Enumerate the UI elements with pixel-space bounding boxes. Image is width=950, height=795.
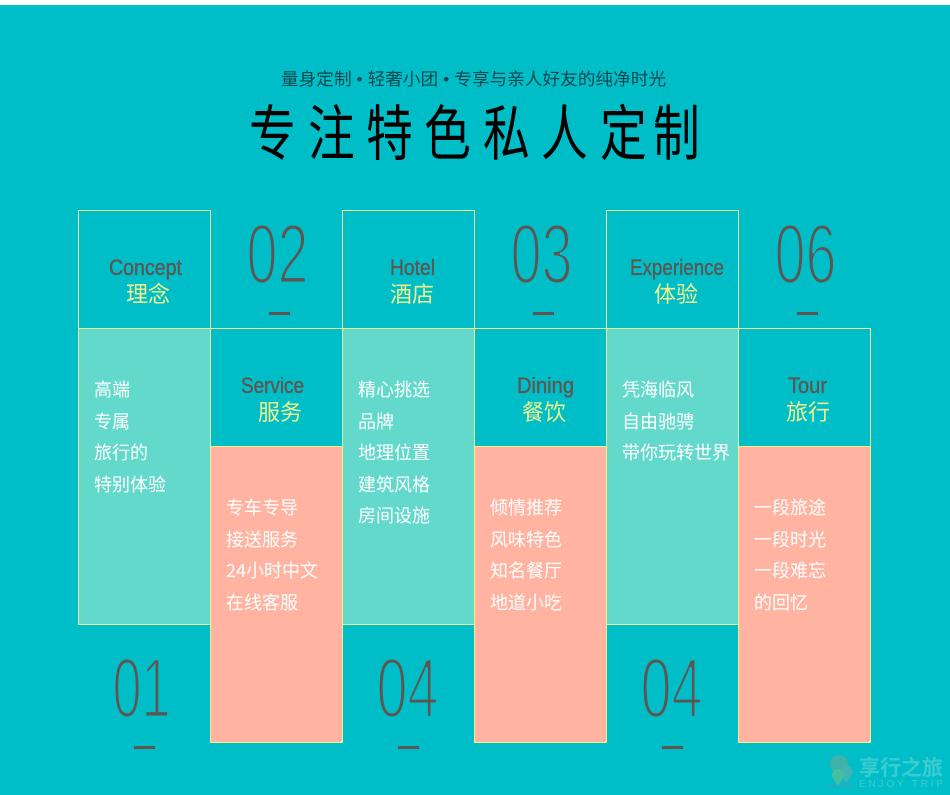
watermark logo: ENJOY TRIP: [859, 779, 943, 790]
panel: experience: 凭海临风: [622, 376, 694, 402]
panel: hotel: [342, 210, 474, 624]
panel: dining: 知名餐厅: [490, 557, 562, 583]
panel: service: 24小时中文: [226, 557, 318, 583]
title: 特: [366, 101, 413, 168]
number 03: 03: [510, 207, 572, 301]
panel: concept: [78, 210, 210, 624]
title: 注: [308, 101, 355, 168]
panel: dining: 地道小吃: [490, 589, 562, 615]
panel: tour: 一段旅途: [754, 494, 826, 520]
panel: hotel: 地理位置: [358, 439, 430, 465]
number 02: 02: [246, 207, 308, 301]
panel: hotel: 酒店: [390, 277, 434, 309]
number 01: [112, 641, 170, 749]
panel: concept: 高端: [94, 376, 130, 402]
title: 色: [424, 101, 471, 168]
number 04: 04: [376, 641, 438, 735]
panel: tour: Tour: [788, 373, 827, 398]
panel: tour: 的回忆: [754, 589, 808, 615]
panel: service: 专车专导: [226, 494, 298, 520]
panel: concept: 旅行的: [94, 439, 148, 465]
panel: service: 服务: [258, 395, 302, 427]
panel: concept: 特别体验: [94, 471, 166, 497]
panel: dining: [474, 328, 606, 742]
panel: service: Service: [241, 373, 304, 398]
number 01: 01: [112, 641, 170, 735]
panel: experience: Experience: [630, 255, 724, 280]
panel: service: [210, 328, 342, 742]
panel: concept: Concept: [109, 255, 182, 280]
panel: dining: 餐饮: [522, 395, 566, 427]
panel: dining: Dining: [517, 373, 574, 398]
number 06: [774, 207, 836, 315]
panel: hotel: Hotel: [390, 255, 435, 280]
panel: experience: [606, 210, 738, 624]
title: 专: [249, 101, 296, 168]
watermark logo: 享行之旅: [859, 756, 943, 780]
panel: concept: 理念: [126, 277, 170, 309]
number 04 second: [640, 641, 702, 749]
title: 制: [653, 101, 700, 168]
panel: service: 在线客服: [226, 589, 298, 615]
panel: tour: 旅行: [786, 395, 830, 427]
subtitle: 量身定制 • 轻奢小团 • 专享与亲人好友的纯净时光: [281, 70, 666, 89]
title: 人: [541, 101, 588, 168]
panel: tour: 一段难忘: [754, 557, 826, 583]
number 04 second: 04: [640, 641, 702, 735]
panel: experience: 体验: [654, 277, 698, 309]
panel: hotel: 品牌: [358, 408, 394, 434]
panel: hotel: 房间设施: [358, 502, 430, 528]
title: 私: [483, 101, 530, 168]
panel: tour: [738, 328, 870, 742]
panel: hotel: 建筑风格: [358, 471, 430, 497]
number 02: [246, 207, 308, 315]
title: 定: [600, 101, 647, 168]
number 04: [376, 641, 438, 749]
panel: dining: 倾情推荐: [490, 494, 562, 520]
panel: hotel: 精心挑选: [358, 376, 430, 402]
panel: experience: 自由驰骋: [622, 408, 694, 434]
panel: tour: 一段时光: [754, 526, 826, 552]
number 06: 06: [774, 207, 836, 301]
watermark logo: [827, 755, 943, 790]
number 03: [510, 207, 572, 315]
panel: service: 接送服务: [226, 526, 298, 552]
title: [249, 101, 700, 168]
panel: experience: 带你玩转世界: [622, 439, 730, 465]
panel: concept: 专属: [94, 408, 130, 434]
panel: dining: 风味特色: [490, 526, 562, 552]
